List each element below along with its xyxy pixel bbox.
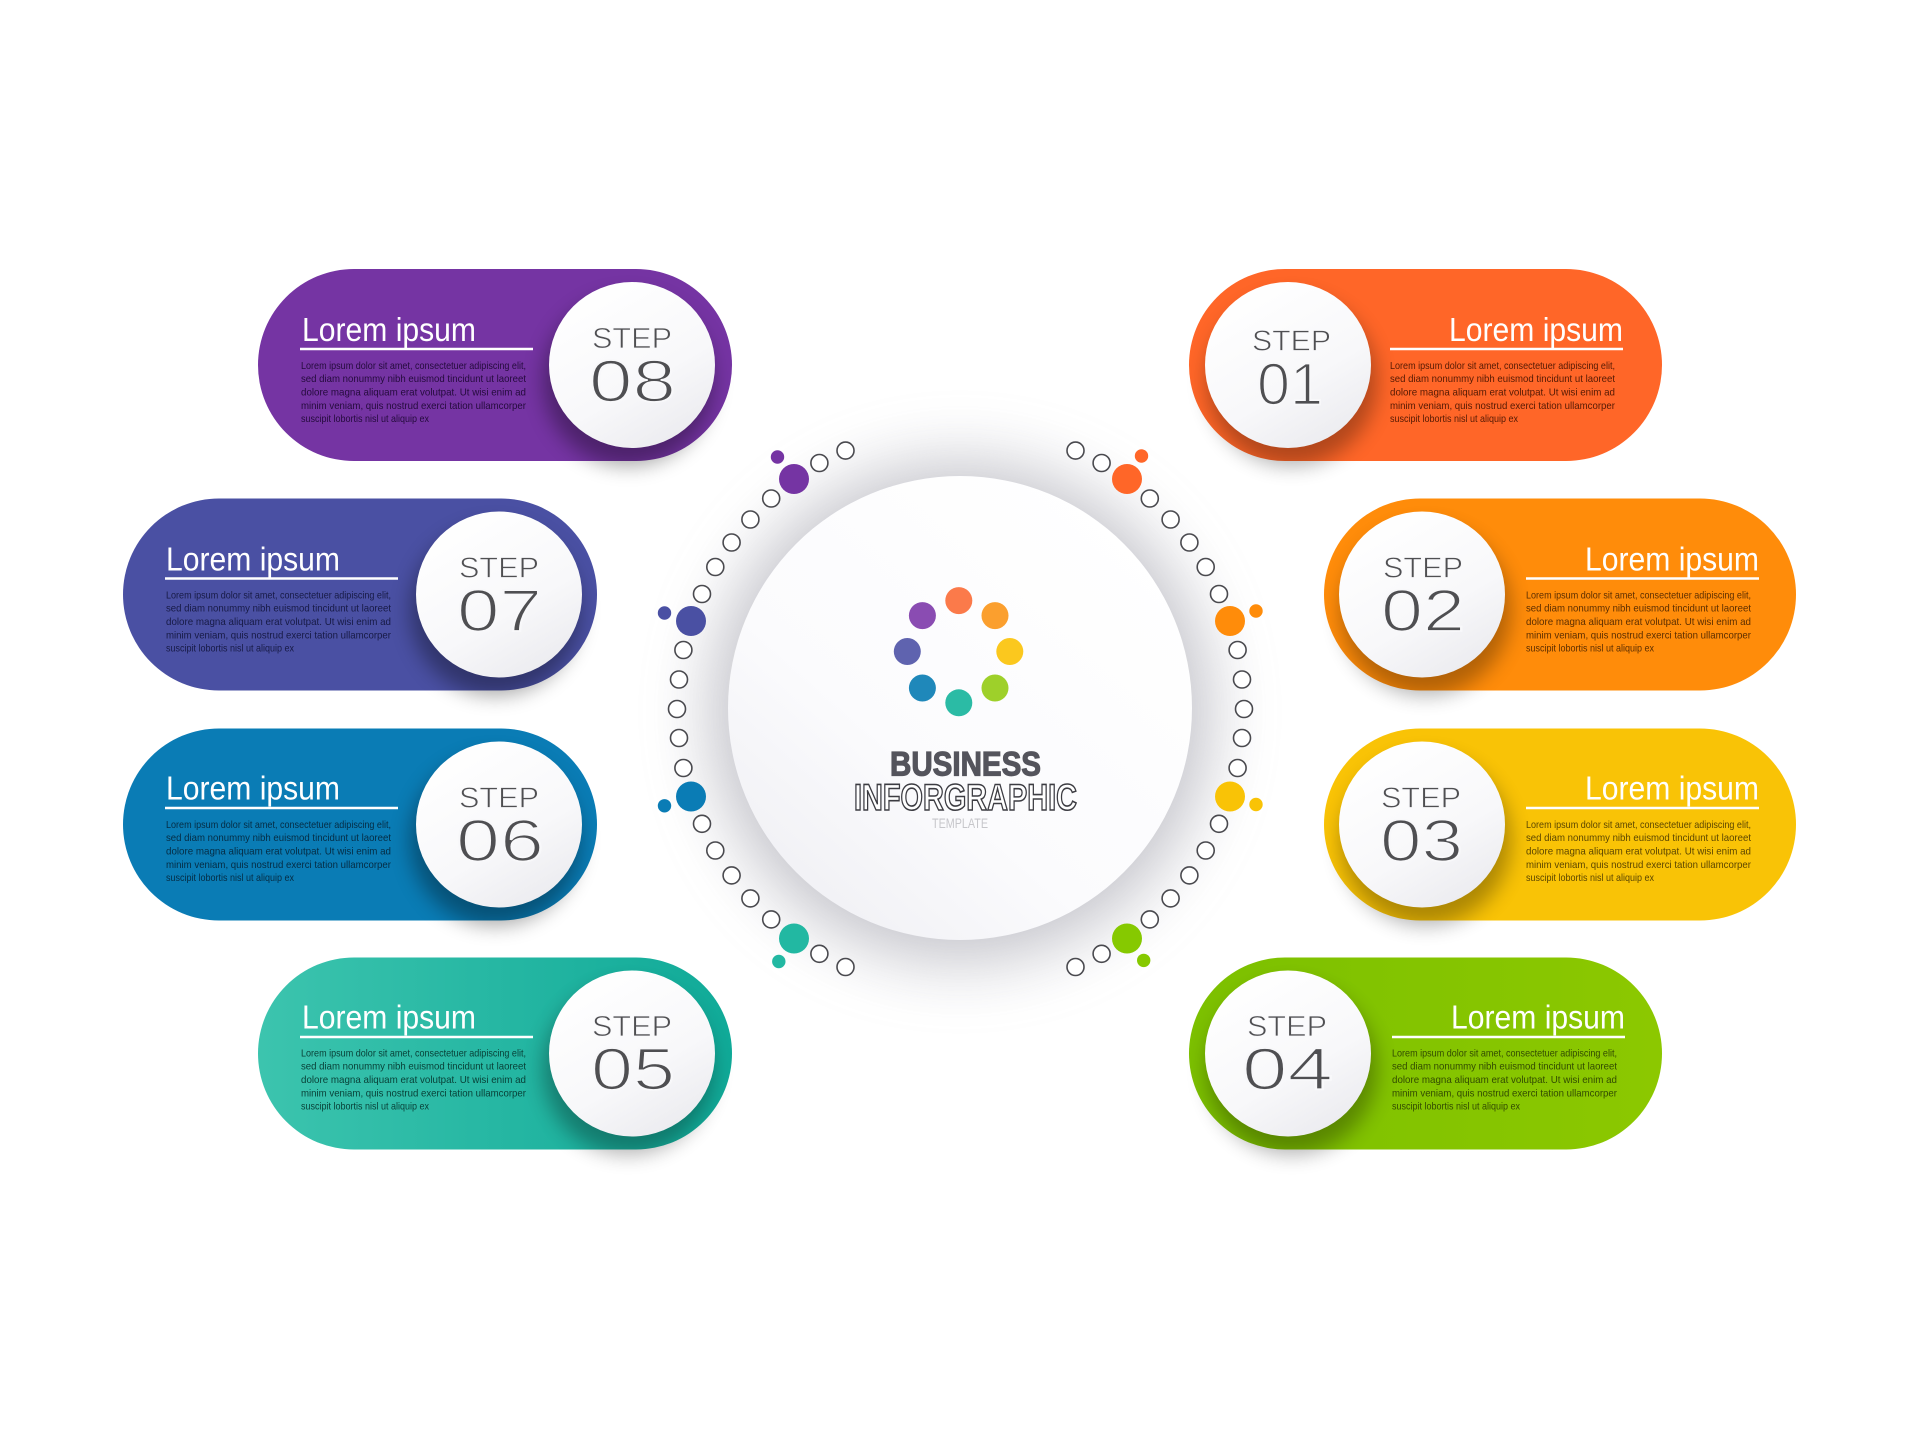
panel: step 08: sed diam nonummy nibh euismod tincidunt ut laoreet xyxy=(301,373,526,385)
icon: center logo dot wheel xyxy=(894,587,1023,716)
panel: step 07 xyxy=(123,498,597,696)
panel: step 07: Lorem ipsum xyxy=(166,540,340,578)
panel: step 03: Lorem ipsum dolor sit amet, consectetuer adipiscing elit, xyxy=(1526,819,1751,831)
panel: step 07: STEP xyxy=(459,553,539,585)
panel: step 05: sed diam nonummy nibh euismod tincidunt ut laoreet xyxy=(301,1061,526,1073)
panel: step 04: minim veniam, quis nostrud exerci tation ullamcorper xyxy=(1392,1087,1617,1099)
panel: step 01 xyxy=(1189,269,1662,466)
panel: step 06: 06 xyxy=(456,808,544,874)
ring markers: coloured dots for each step xyxy=(658,449,1263,968)
panel: step 08: minim veniam, quis nostrud exerci tation ullamcorper xyxy=(301,400,526,412)
panel: step 06: minim veniam, quis nostrud exerci tation ullamcorper xyxy=(166,859,391,871)
panel: step 05: STEP xyxy=(592,1011,672,1043)
panel: step 02: sed diam nonummy nibh euismod tincidunt ut laoreet xyxy=(1526,603,1751,615)
panel: step 07: dolore magna aliquam erat volutpat. Ut wisi enim ad xyxy=(166,616,391,628)
panel: step 02 xyxy=(1324,498,1796,696)
panel: step 06: sed diam nonummy nibh euismod tincidunt ut laoreet xyxy=(166,832,391,844)
panel: step 02: Lorem ipsum xyxy=(1585,540,1759,578)
panel: step 04: Lorem ipsum xyxy=(1451,998,1625,1036)
panel: step 02: 02 xyxy=(1381,578,1465,644)
panel: step 04: Lorem ipsum dolor sit amet, consectetuer adipiscing elit, xyxy=(1392,1047,1617,1059)
panel: step 05: suscipit lobortis nisl ut aliquip ex xyxy=(301,1101,430,1113)
panel: step 03 xyxy=(1324,728,1796,926)
title: business infographic template: TEMPLATE xyxy=(932,816,988,831)
panel: step 01: suscipit lobortis nisl ut aliquip ex xyxy=(1390,413,1519,425)
panel: step 08 xyxy=(258,269,732,466)
panel: step 08: 08 xyxy=(589,348,676,414)
panel: step 03: sed diam nonummy nibh euismod tincidunt ut laoreet xyxy=(1526,832,1751,844)
panel: step 01: Lorem ipsum xyxy=(1449,311,1623,348)
panel: step 08: suscipit lobortis nisl ut aliquip ex xyxy=(301,413,430,425)
dotted ring: left and right arcs of open circles xyxy=(668,442,1252,976)
panel: step 08: Lorem ipsum dolor sit amet, consectetuer adipiscing elit, xyxy=(301,360,526,372)
panel: step 07: minim veniam, quis nostrud exerci tation ullamcorper xyxy=(166,629,391,641)
panel: step 08: Lorem ipsum xyxy=(302,311,476,348)
panel: step 01: 01 xyxy=(1257,351,1323,417)
panel: step 01: sed diam nonummy nibh euismod tincidunt ut laoreet xyxy=(1390,373,1615,385)
panel: step 02: Lorem ipsum dolor sit amet, consectetuer adipiscing elit, xyxy=(1526,589,1751,601)
panel: step 01: STEP xyxy=(1252,325,1331,357)
panel: center circle xyxy=(712,464,1208,960)
panel: step 03: STEP xyxy=(1381,783,1461,815)
title: business infographic template: INFORGRAPHIC xyxy=(854,777,1077,818)
panel: step 01: dolore magna aliquam erat volutpat. Ut wisi enim ad xyxy=(1390,386,1615,398)
panel: step 02: suscipit lobortis nisl ut aliquip ex xyxy=(1526,643,1655,655)
panel: step 04 xyxy=(1189,958,1662,1154)
panel: step 01: minim veniam, quis nostrud exerci tation ullamcorper xyxy=(1390,400,1615,412)
panel: step 02: minim veniam, quis nostrud exerci tation ullamcorper xyxy=(1526,629,1751,641)
panel: step 03: 03 xyxy=(1380,808,1463,874)
panel: step 02: dolore magna aliquam erat volutpat. Ut wisi enim ad xyxy=(1526,616,1751,628)
panel: step 05: minim veniam, quis nostrud exerci tation ullamcorper xyxy=(301,1087,526,1099)
title: business infographic template: BUSINESS xyxy=(890,746,1041,784)
panel: step 01: Lorem ipsum dolor sit amet, consectetuer adipiscing elit, xyxy=(1390,360,1615,372)
panel: step 07: 07 xyxy=(457,578,542,644)
title: business infographic template xyxy=(854,746,1077,831)
panel: step 07: sed diam nonummy nibh euismod tincidunt ut laoreet xyxy=(166,603,391,615)
panel: step 06 xyxy=(123,728,597,926)
panel: step 05: Lorem ipsum xyxy=(302,998,476,1036)
panel: step 04: STEP xyxy=(1247,1011,1327,1043)
panel: step 06: STEP xyxy=(459,783,539,815)
panel: step 02: STEP xyxy=(1383,553,1463,585)
panel: step 04: sed diam nonummy nibh euismod tincidunt ut laoreet xyxy=(1392,1061,1617,1073)
panel: step 08: STEP xyxy=(592,323,672,355)
panel: step 04: suscipit lobortis nisl ut aliquip ex xyxy=(1392,1101,1521,1113)
panel: step 05: dolore magna aliquam erat volutpat. Ut wisi enim ad xyxy=(301,1074,526,1086)
panel: step 07: Lorem ipsum dolor sit amet, consectetuer adipiscing elit, xyxy=(166,589,391,601)
panel: step 03: minim veniam, quis nostrud exerci tation ullamcorper xyxy=(1526,859,1751,871)
panel: step 06: Lorem ipsum xyxy=(166,770,340,806)
panel: step 05: 05 xyxy=(591,1036,675,1102)
panel: step 04: dolore magna aliquam erat volutpat. Ut wisi enim ad xyxy=(1392,1074,1617,1086)
panel: step 06: dolore magna aliquam erat volutpat. Ut wisi enim ad xyxy=(166,845,391,857)
panel: step 07: suscipit lobortis nisl ut aliquip ex xyxy=(166,643,295,655)
panel: step 06: Lorem ipsum dolor sit amet, consectetuer adipiscing elit, xyxy=(166,819,391,831)
panel: step 05: Lorem ipsum dolor sit amet, consectetuer adipiscing elit, xyxy=(301,1047,526,1059)
panel: step 05 xyxy=(258,958,732,1154)
panel: step 03: dolore magna aliquam erat volutpat. Ut wisi enim ad xyxy=(1526,845,1751,857)
panel: step 03: Lorem ipsum xyxy=(1585,770,1759,806)
panel: step 08: dolore magna aliquam erat volutpat. Ut wisi enim ad xyxy=(301,386,526,398)
panel: step 04: 04 xyxy=(1242,1036,1333,1102)
panel: step 03: suscipit lobortis nisl ut aliquip ex xyxy=(1526,872,1655,884)
panel: step 06: suscipit lobortis nisl ut aliquip ex xyxy=(166,872,295,884)
